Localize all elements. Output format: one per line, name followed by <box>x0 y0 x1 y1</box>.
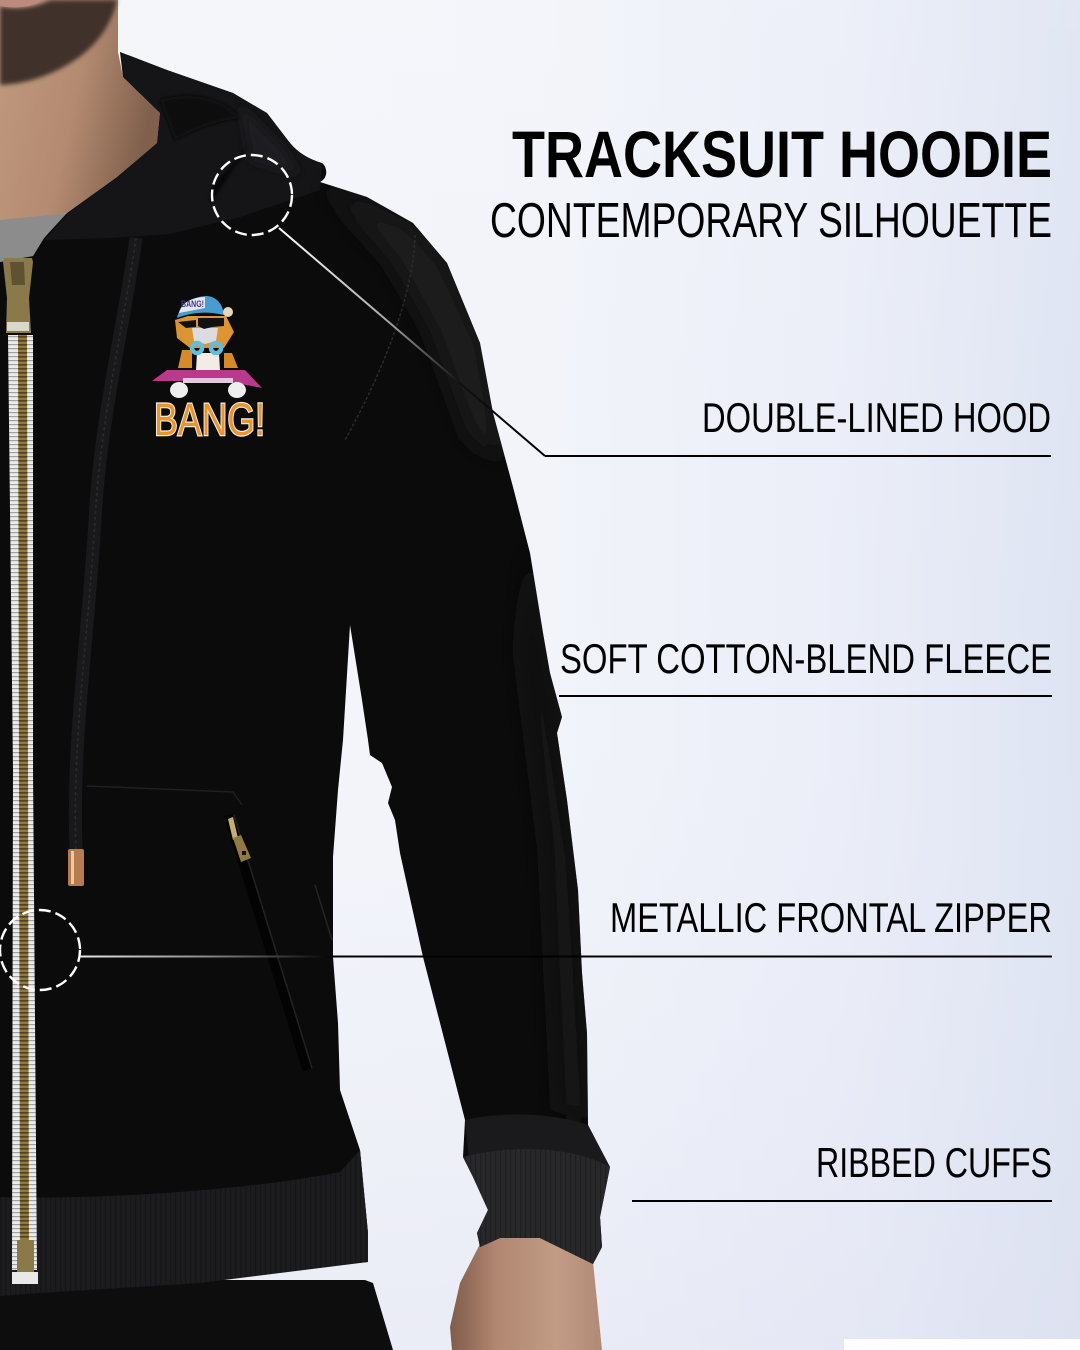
pouch pocket <box>87 786 332 1070</box>
callout marker: hood <box>212 155 545 456</box>
trousers <box>0 1280 393 1350</box>
grey t-shirt <box>0 213 68 262</box>
lips <box>0 0 42 7</box>
cuff ribbing <box>463 1149 610 1264</box>
embroidered logo: BANG tiger DJ <box>152 296 265 445</box>
hood drawstring <box>68 238 136 886</box>
cap <box>177 296 224 318</box>
dj deck <box>152 370 262 388</box>
neck and chest skin <box>0 0 160 222</box>
feet <box>170 382 188 398</box>
embroidered logo: BANG tiger DJ: BANG! <box>181 299 204 309</box>
hem ribbing <box>0 1150 368 1296</box>
hand <box>450 1238 602 1350</box>
pocket zip pull <box>228 817 251 862</box>
beard <box>0 0 117 85</box>
tiger head <box>175 316 234 348</box>
headphones <box>192 343 221 353</box>
front zipper <box>3 258 38 1284</box>
tiger arms <box>178 350 238 368</box>
hoodie silhouette <box>0 52 610 1296</box>
sleeve seam <box>345 235 415 440</box>
tiger belly <box>196 353 220 370</box>
callout marker: zipper <box>0 910 336 990</box>
photo: model wearing hoodie <box>0 0 610 1350</box>
logo wordmark: BANG! <box>154 394 265 445</box>
shading on the fabric <box>45 52 610 1170</box>
